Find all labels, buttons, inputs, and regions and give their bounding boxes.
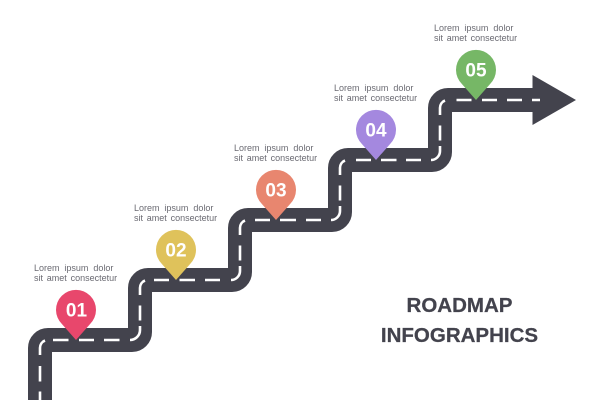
pin 02: 02 bbox=[165, 240, 187, 262]
pin 04: 04 bbox=[365, 120, 387, 142]
pin 03: 03 bbox=[265, 180, 287, 202]
caption 03: sit amet consectetur bbox=[234, 153, 317, 163]
caption 02: Lorem ipsum dolor bbox=[134, 203, 213, 213]
pin 03 bbox=[256, 170, 296, 220]
title: ROADMAP bbox=[407, 294, 512, 317]
pin 05 bbox=[456, 50, 496, 100]
roadmap road with arrow bbox=[40, 75, 576, 400]
pin 01 bbox=[56, 290, 96, 340]
caption 02: sit amet consectetur bbox=[134, 213, 217, 223]
caption 04: sit amet consectetur bbox=[334, 93, 417, 103]
pin 02 bbox=[156, 230, 196, 280]
caption 01: sit amet consectetur bbox=[34, 273, 117, 283]
caption 05: sit amet consectetur bbox=[434, 33, 517, 43]
caption 03: Lorem ipsum dolor bbox=[234, 143, 313, 153]
pin 05: 05 bbox=[465, 60, 487, 82]
caption 05: Lorem ipsum dolor bbox=[434, 23, 513, 33]
caption 04: Lorem ipsum dolor bbox=[334, 83, 413, 93]
caption 01: Lorem ipsum dolor bbox=[34, 263, 113, 273]
pin 04 bbox=[356, 110, 396, 160]
title: INFOGRAPHICS bbox=[381, 324, 538, 347]
pin 01: 01 bbox=[66, 300, 87, 322]
